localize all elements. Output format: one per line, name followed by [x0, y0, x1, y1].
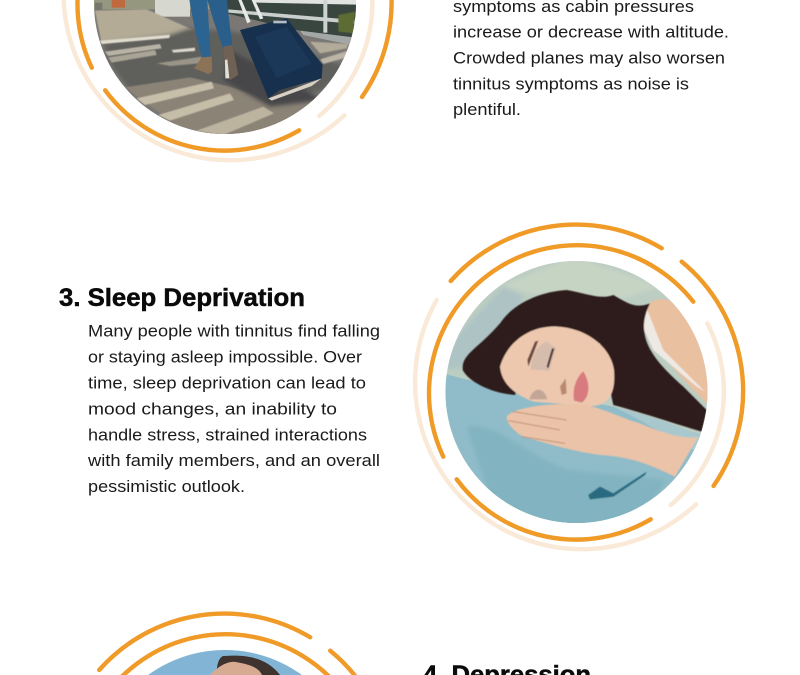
text: sleep deprivation description: with family members, and an overall: [87, 451, 380, 470]
text: air travel description: tinnitus symptoms as noise is: [453, 74, 689, 93]
section: sleep deprivation: [59, 225, 743, 549]
text: air travel description: Crowded planes may also worsen: [453, 48, 725, 68]
text: air travel description: plentiful.: [453, 100, 521, 119]
text: sleep deprivation description: handle stress, strained interactions: [88, 425, 367, 444]
text: sleep deprivation description: Many people with tinnitus find falling: [88, 322, 380, 341]
text: sleep deprivation description: or staying asleep impossible. Over: [88, 348, 362, 367]
rings: sleep deprivation: [415, 225, 743, 549]
rings: air travel: [64, 0, 392, 160]
photo: woman sleeping: [443, 257, 710, 530]
text: sleep deprivation description: [87, 322, 380, 496]
section: air travel: [64, 0, 729, 160]
text: air travel description: increase or decrease with altitude.: [453, 23, 729, 42]
section: depression: [64, 614, 591, 675]
text: air travel description: [453, 0, 729, 119]
text: sleep deprivation description: mood changes, an inability to: [88, 399, 337, 418]
photo: man holding head: [148, 650, 302, 675]
heading: sleep deprivation: 3. Sleep Deprivation: [59, 284, 305, 312]
text: sleep deprivation description: time, sleep deprivation can lead to: [88, 374, 366, 392]
text: sleep deprivation description: pessimistic outlook.: [88, 477, 245, 496]
photo: traveller with suitcase: [90, 0, 360, 140]
rings: depression: [64, 614, 392, 675]
